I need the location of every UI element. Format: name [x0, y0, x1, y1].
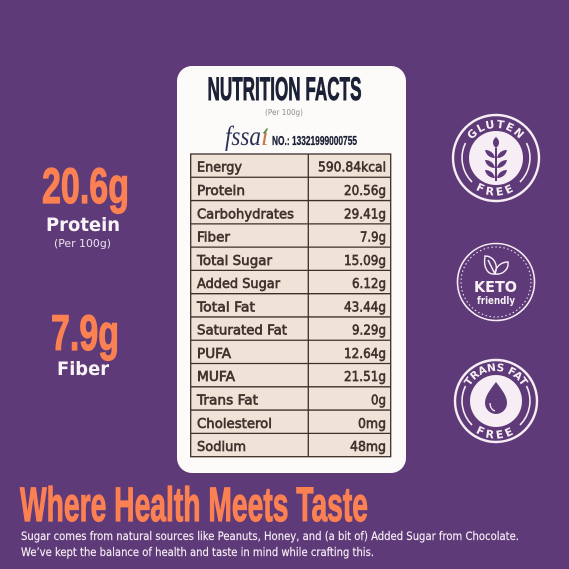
icon: trans fat free badge: TRANS FAT [463, 363, 529, 384]
callout: protein [42, 158, 129, 250]
panel: nutrition card [177, 66, 406, 473]
nutrition table: PUFA [197, 347, 231, 362]
callout: protein: 20.6g [42, 158, 129, 214]
nutrition table: 29.41g [344, 207, 386, 222]
nutrition table: Protein [197, 184, 245, 199]
fssai licence: fssa [225, 121, 261, 151]
nutrition table: 12.64g [344, 347, 386, 362]
nutrition table: 590.84kcal [318, 161, 386, 176]
nutrition table: Sodium [197, 440, 246, 455]
nutrition table: MUFA [197, 370, 235, 385]
callout: fiber [51, 305, 119, 380]
icon: gluten free badge: GLUTEN [468, 120, 524, 138]
icon: trans fat free badge: FREE [476, 426, 514, 439]
callout: protein: Protein [46, 214, 120, 236]
fssai licence: NO.: 13321999000755 [272, 134, 357, 148]
fssai licence: ı [261, 121, 269, 151]
nutrition table: 15.09g [344, 254, 386, 269]
nutrition table: Energy [197, 161, 242, 176]
icon: keto friendly badge: friendly [477, 295, 515, 307]
nutrition table: Cholesterol [197, 417, 272, 432]
icon: keto friendly badge [458, 244, 534, 320]
nutrition table: Saturated Fat [197, 324, 287, 339]
icon: keto friendly badge: KETO [474, 278, 517, 296]
text: per 100g: (Per 100g) [265, 108, 303, 117]
nutrition table: 0mg [358, 417, 386, 432]
heading: nutrition facts: NUTRITION FACTS [208, 71, 362, 107]
callout: fiber: Fiber [57, 358, 110, 380]
fssai licence [225, 121, 357, 151]
nutrition table: 43.44g [344, 300, 386, 315]
nutrition table: 7.9g [360, 230, 386, 246]
nutrition table: Fiber [197, 230, 231, 246]
nutrition table: Total Fat [196, 300, 255, 315]
nutrition table: Added Sugar [197, 277, 281, 292]
nutrition table: Trans Fat [196, 394, 258, 408]
nutrition table: 21.51g [344, 370, 386, 385]
icon: gluten free badge: FREE [476, 182, 514, 196]
nutrition table: 48mg [350, 440, 386, 455]
icon: trans fat free badge [454, 358, 538, 444]
nutrition table: 6.12g [352, 277, 386, 292]
nutrition table [191, 154, 391, 457]
nutrition table: 0g [371, 394, 386, 408]
callout: fiber: 7.9g [51, 305, 119, 361]
text: sugar description [21, 529, 519, 559]
icon: gluten free badge [452, 114, 540, 202]
nutrition table: 20.56g [344, 184, 386, 199]
nutrition table: 9.29g [352, 324, 386, 339]
callout: protein: (Per 100g) [54, 237, 111, 250]
text: sugar description: We’ve kept the balance of health and taste in mind while crafting this. [21, 545, 374, 559]
nutrition table: Total Sugar [196, 254, 273, 269]
nutrition table: Carbohydrates [197, 207, 294, 222]
